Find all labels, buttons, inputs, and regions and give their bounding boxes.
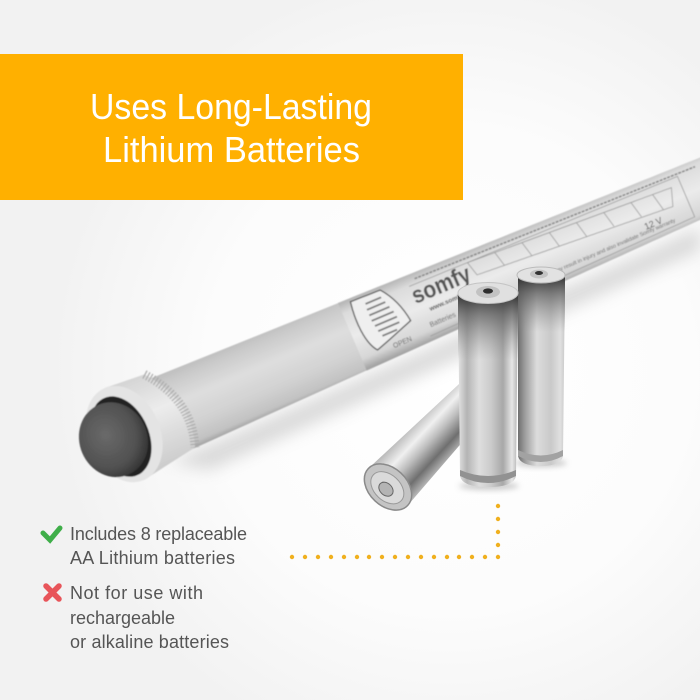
- dotted connector: [290, 504, 500, 559]
- back battery: [515, 267, 567, 467]
- icon: cross: [46, 586, 59, 599]
- motor tube: [62, 94, 700, 498]
- feature text: not for: or alkaline batteries: [70, 632, 229, 652]
- end ring: [105, 363, 204, 480]
- banner title: Uses Long-Lasting: [90, 86, 372, 127]
- banner: [0, 54, 463, 200]
- dome rim: [79, 387, 163, 486]
- printed label: [338, 106, 700, 371]
- printed label: OPEN: [392, 336, 413, 350]
- feature text: includes: AA Lithium batteries: [70, 548, 235, 568]
- somfy logo: somfy: [407, 260, 476, 310]
- icon: check: [43, 528, 60, 540]
- knurled collar: [144, 365, 200, 454]
- printed label: may result in injury and also invalidate Somfy warranty: [552, 218, 677, 276]
- tube shadow: [170, 228, 700, 470]
- rubber dome: [67, 391, 160, 488]
- tube body: [140, 102, 700, 458]
- label box: [409, 173, 697, 336]
- label fine print: 12 V: [643, 215, 664, 232]
- label grid: [467, 178, 678, 289]
- feature text: includes: Includes 8 replaceable: [70, 524, 247, 544]
- fine print line: [415, 160, 695, 285]
- banner title: Lithium Batteries: [103, 129, 360, 170]
- feature text: not for: Not for use with: [70, 583, 203, 603]
- lying battery: [355, 375, 495, 519]
- printed label: www.somfy: [428, 292, 465, 313]
- feature text: not for: rechargeable: [70, 608, 175, 628]
- front battery: [458, 282, 519, 490]
- printed label: Batteries: [429, 312, 458, 329]
